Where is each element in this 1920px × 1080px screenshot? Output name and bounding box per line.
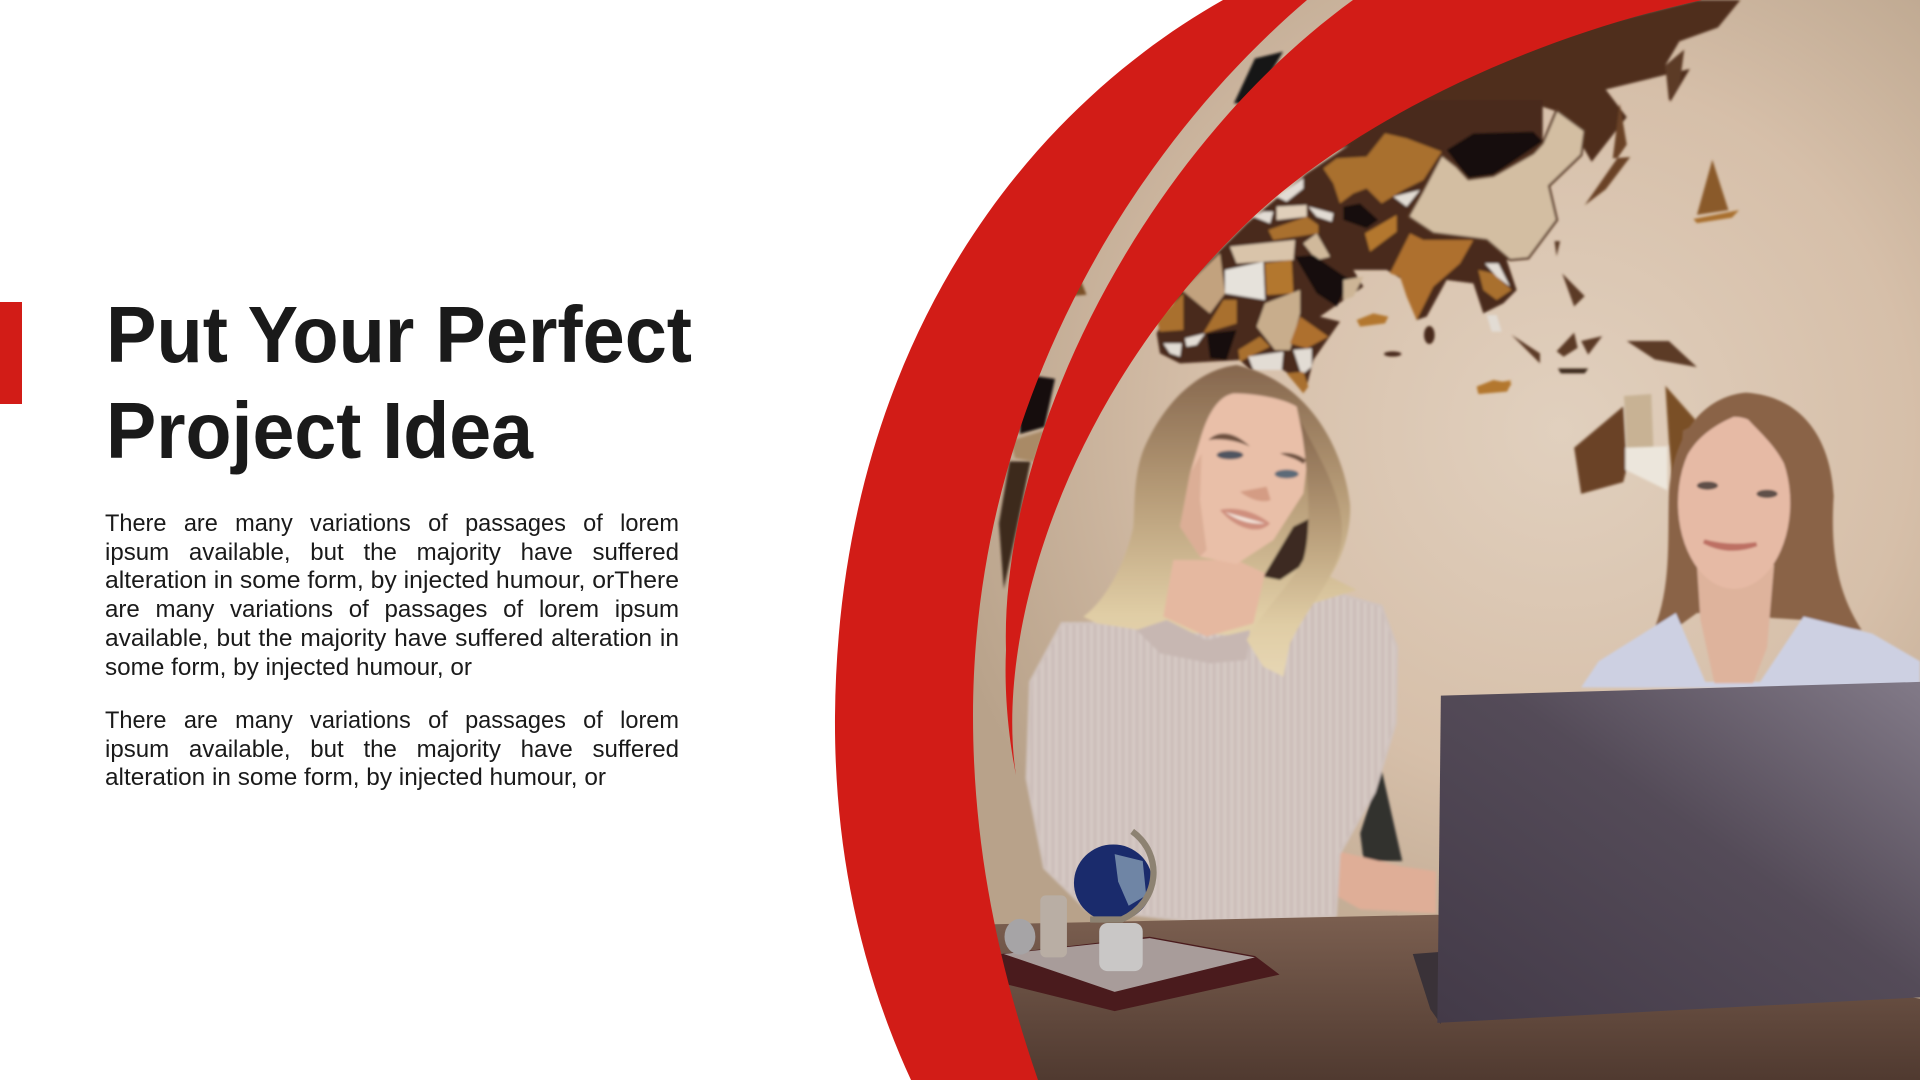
red inner blade [1006,0,1702,775]
paragraph two [105,707,679,791]
paragraph one: are many variations of passages of lorem ipsum [105,596,679,623]
laptop [1413,682,1920,1024]
world map [999,0,1740,589]
paragraph two: ipsum available, but the majority have suffered [105,736,679,763]
paragraph one: There are many variations of passages of lorem [105,510,679,537]
paragraph two: There are many variations of passages of lorem [105,707,679,734]
title [106,290,692,475]
accent bar [0,302,22,404]
title: Project Idea [106,386,533,475]
paragraph one: some form, by injected humour, or [105,654,472,681]
title: Put Your Perfect [106,290,692,379]
paragraph one [105,510,679,681]
woman right [1581,393,1920,689]
woman left [1027,365,1436,922]
desk [988,915,1920,1080]
paragraph one: available, but the majority have suffered alteration in [105,625,679,652]
paragraph one: alteration in some form, by injected humour, orThere [105,567,679,594]
paragraph one: ipsum available, but the majority have suffered [105,539,679,566]
desk globe ornament [1001,831,1280,1011]
paragraph two: alteration in some form, by injected humour, or [105,764,606,791]
photo: two women at a desk with a world map [973,0,1920,1080]
red outer swoosh [835,0,1307,1080]
